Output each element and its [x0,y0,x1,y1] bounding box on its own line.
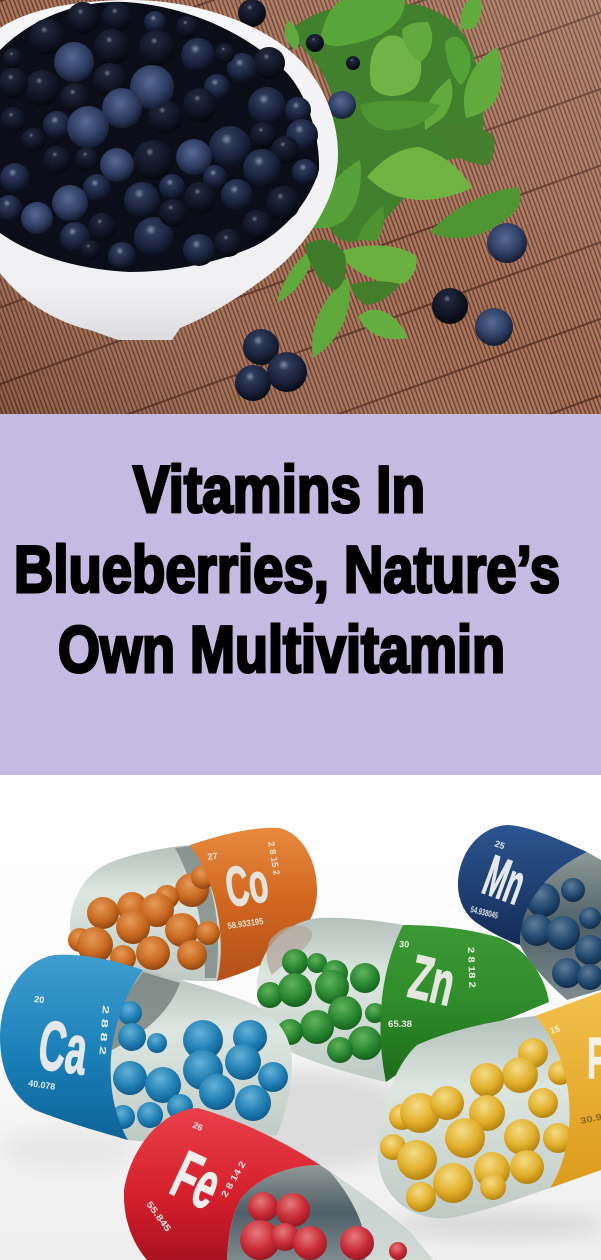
capsule: calcium: 40.078 [28,1078,56,1092]
capsule: cobalt: 2 8 15 2 [266,841,282,876]
capsule: yellow [378,992,601,1218]
capsule: manganese: 54.938045 [470,904,499,921]
capsule: calcium: 2 8 8 2 [98,1005,111,1055]
berries in the bowl [0,2,319,272]
capsule: manganese: Mn [476,843,533,917]
capsule: zinc: 65.38 [388,1019,412,1029]
capsule: cobalt: 58.933195 [227,916,264,931]
capsule: iron: Fe [161,1137,233,1224]
capsule: manganese: 25 [493,838,506,851]
white bowl [0,0,338,340]
capsule: cobalt: 27 [207,851,218,862]
title heading: Own Multivitamin [58,612,505,686]
capsule: iron: 55.845 [144,1199,173,1233]
capsule: zinc: 2 8 18 2 [466,947,477,988]
capsule: calcium [0,955,292,1142]
bamboo mat background [0,0,601,414]
capsule: cobalt: Co [221,850,272,919]
capsule: calcium: 20 [34,994,45,1005]
capsule: iron: 2 8 14 2 [219,1159,248,1199]
capsule: zinc [257,918,549,1082]
capsule: iron [124,1108,433,1260]
photo: blueberries in a white bowl on a bamboo mat [0,0,601,414]
capsule: zinc: Zn [403,942,461,1020]
capsule: calcium: Ca [34,1006,93,1090]
capsule: cobalt [68,828,317,981]
title panel [0,414,601,775]
floor and soft shadows [0,775,601,1260]
leaves [277,0,520,358]
capsule: yellow: 15 [549,1023,561,1036]
capsule: manganese [458,825,601,1000]
loose blueberries [235,0,527,401]
capsule: iron: 26 [191,1120,204,1133]
photo: element capsules on white [0,825,601,1260]
title heading: Vitamins In [133,452,425,526]
capsule: zinc: 30 [399,939,409,950]
title heading [14,452,560,686]
